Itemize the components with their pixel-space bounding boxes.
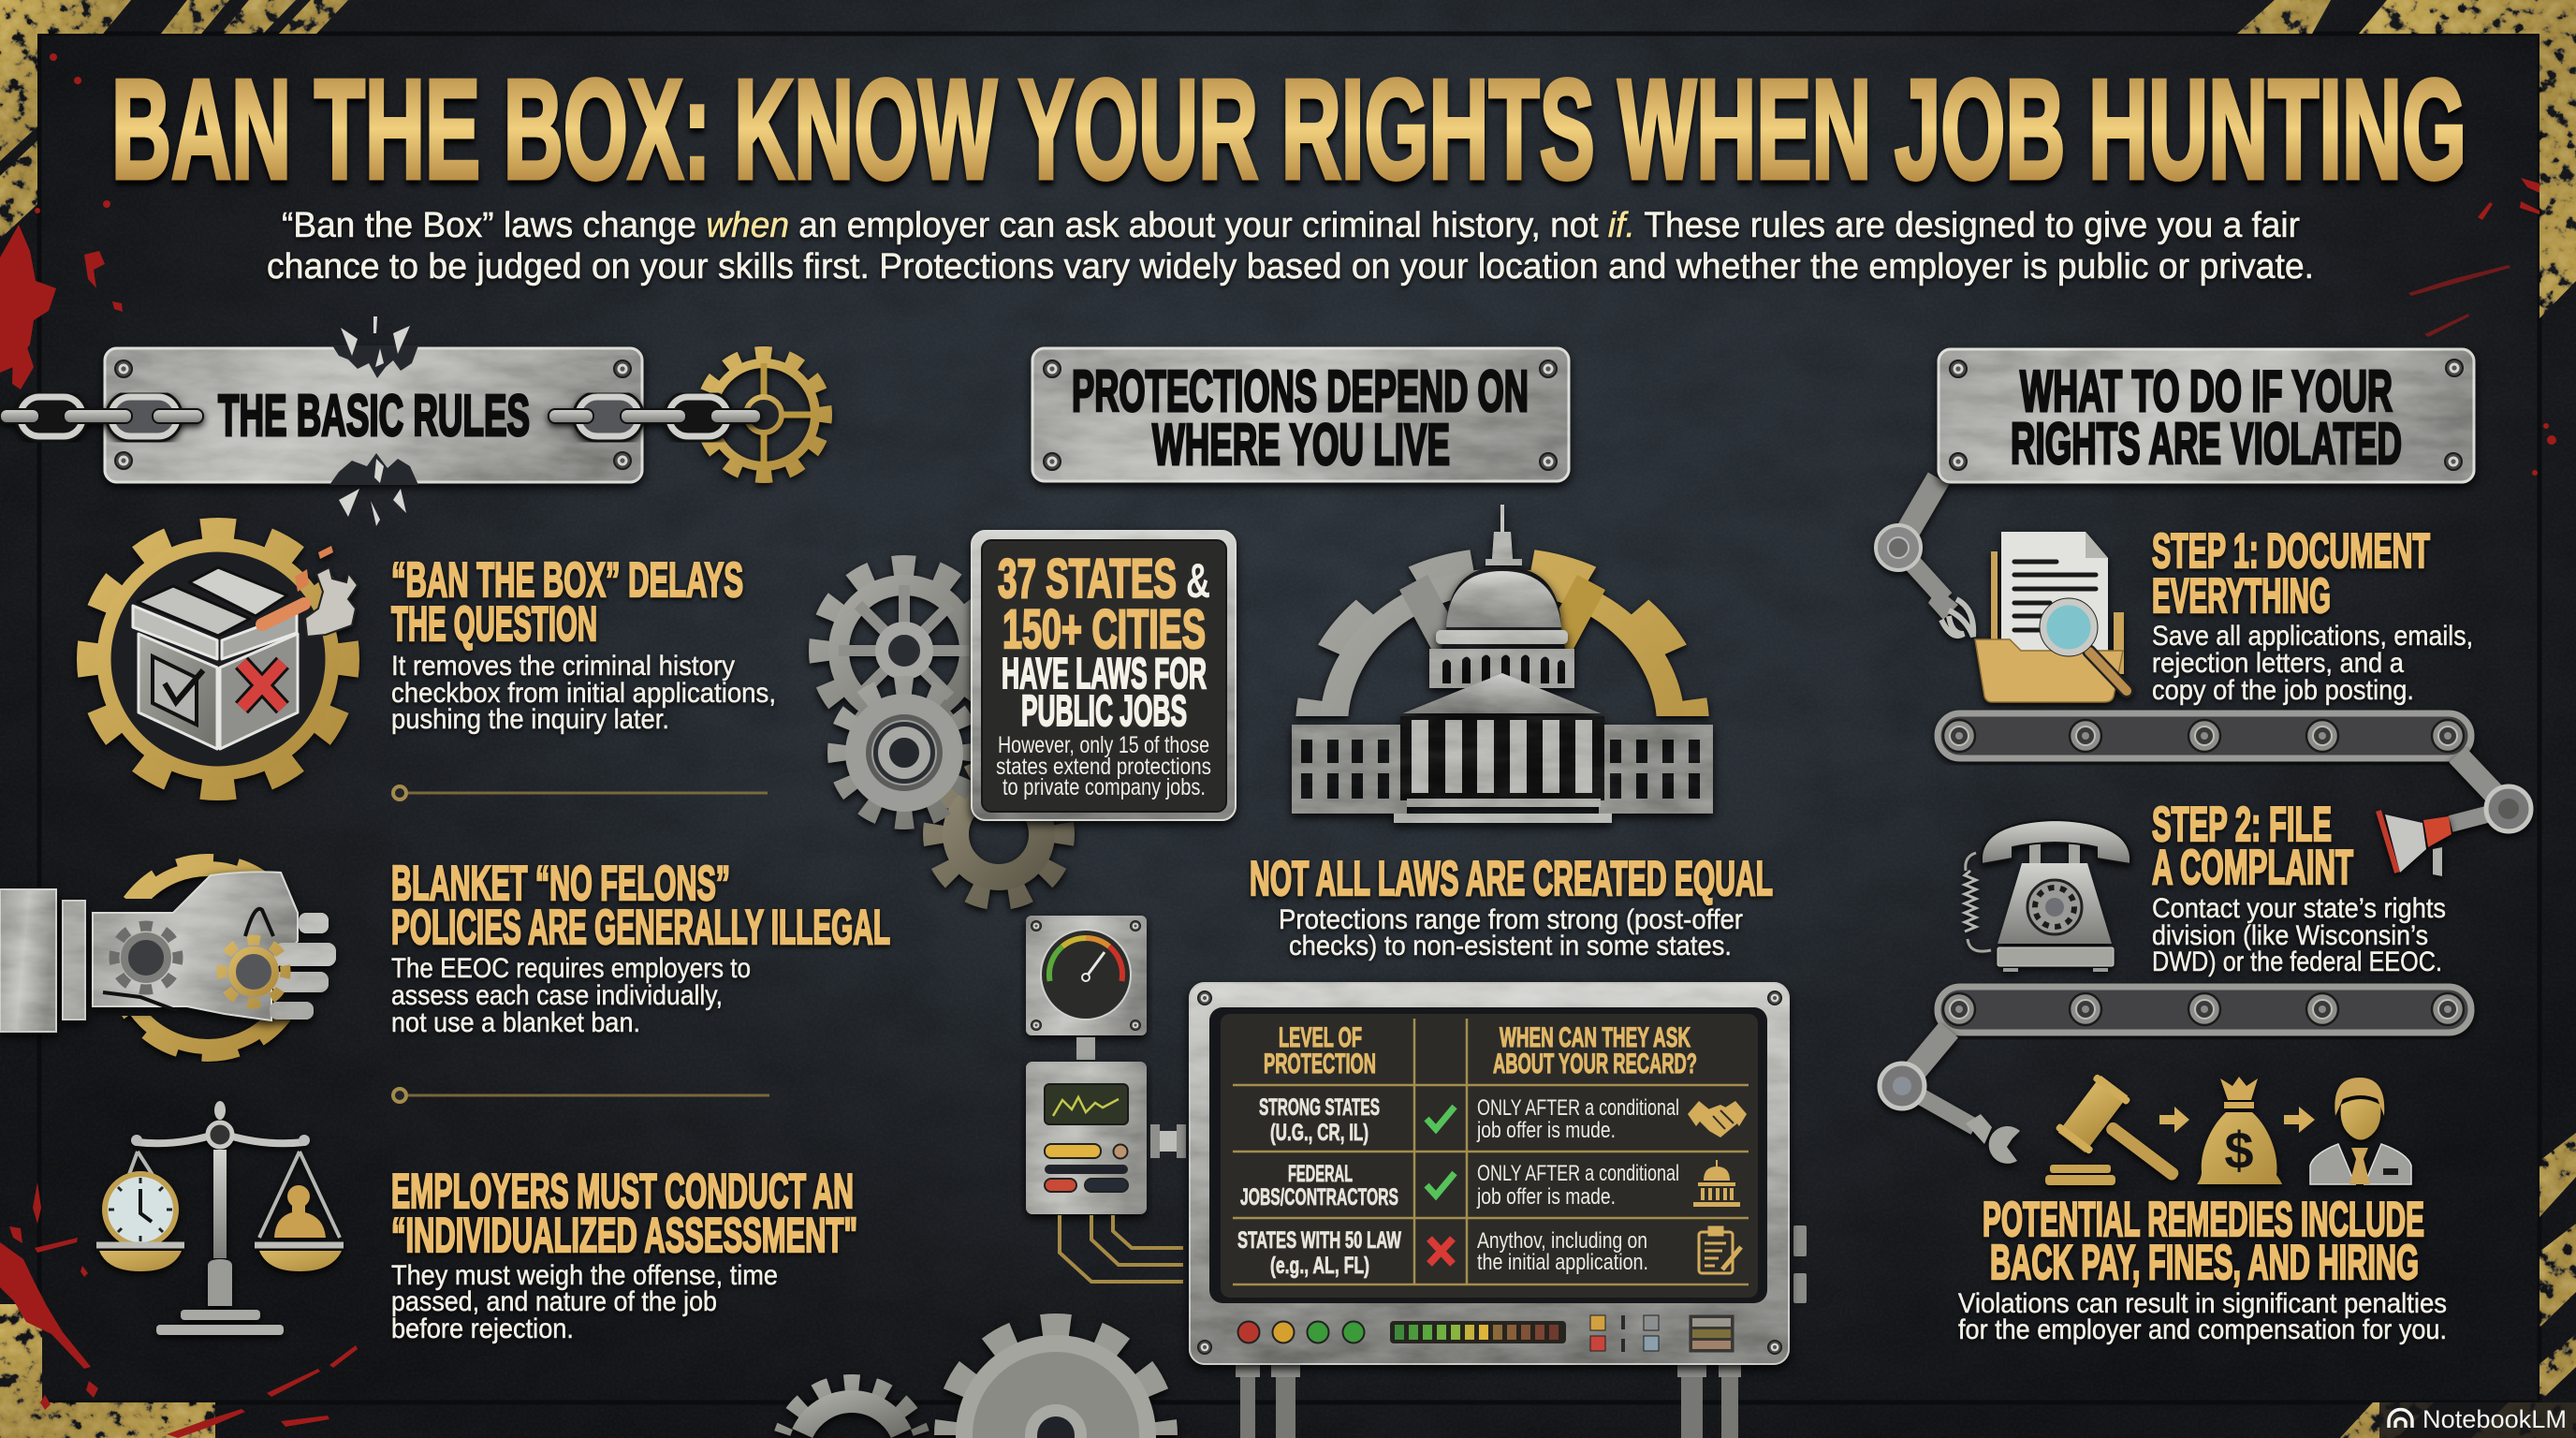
intro text: “Ban the Box” laws change when an employer can ask about your criminal history, not if. These rules are designed to give you a fair xyxy=(282,206,2300,245)
text block: potential remedies: for the employer and compensation for you. xyxy=(1958,1314,2447,1345)
table row: strong states: (U.G., CR, IL) xyxy=(1270,1120,1368,1146)
stat box: states extend protections xyxy=(996,754,1211,780)
heading plate: the basic rules: THE BASIC RULES xyxy=(218,384,530,448)
watermark: NotebookLM: NotebookLM xyxy=(2422,1405,2567,1433)
icon: money bag xyxy=(2197,1077,2282,1184)
table row: strong states xyxy=(1259,1094,1747,1146)
text block: step 2 xyxy=(2152,798,2446,977)
conveyor 2 xyxy=(1938,987,2471,1033)
arm with wrench xyxy=(1880,1030,2020,1164)
stat box: 150+ CITIES xyxy=(1003,599,1206,660)
text block: step 1: rejection letters, and a xyxy=(2152,648,2404,679)
text block: individualized assessment: They must weigh the offense, time xyxy=(391,1260,778,1291)
text block: ban the box delays: checkbox from initial applications, xyxy=(391,678,776,709)
stacked steel gears xyxy=(820,566,1064,900)
text block: not all laws are created equal: checks) to non-esistent in some states. xyxy=(1289,931,1732,961)
icon: capitol with gears xyxy=(1287,505,1718,831)
stat box: & xyxy=(1186,554,1210,609)
bottom gears xyxy=(783,1325,1166,1438)
intro text: chance to be judged on your skills first. Protections vary widely based on your location and whether the employer is public or private. xyxy=(267,247,2314,286)
text block: step 1: EVERYTHING xyxy=(2152,569,2331,624)
stat box: PUBLIC JOBS xyxy=(1021,686,1187,735)
panel: the basic rules xyxy=(0,316,890,1344)
monitor legs xyxy=(1236,1364,1741,1438)
table row: no law: the initial application. xyxy=(1477,1250,1648,1275)
text block: blanket no felons: BLANKET “NO FELONS” xyxy=(391,857,730,911)
watermark: NotebookLM xyxy=(2379,1402,2576,1438)
gear connected to chain xyxy=(702,353,826,477)
panel: protections depend on where you live xyxy=(783,348,1807,1438)
text block: step 2: STEP 2: FILE xyxy=(2152,798,2332,852)
text block: not all laws are created equal: Protections range from strong (post-offer xyxy=(1279,904,1743,935)
text block: step 1: copy of the job posting. xyxy=(2152,675,2414,706)
icon: megaphone xyxy=(2378,811,2452,876)
stat box xyxy=(972,531,1236,820)
stat box: to private company jobs. xyxy=(1003,774,1206,800)
text block: ban the box delays: THE QUESTION xyxy=(391,597,597,652)
text block: potential remedies xyxy=(1958,1193,2447,1345)
control box xyxy=(1026,1062,1186,1214)
table row: strong states: STRONG STATES xyxy=(1259,1094,1380,1121)
text block: step 2: division (like Wisconsin’s xyxy=(2152,920,2428,951)
gauge box xyxy=(1026,916,1147,1035)
table row: federal: FEDERAL xyxy=(1288,1161,1353,1187)
icon: document folder and magnifier xyxy=(1975,532,2127,702)
heading plate: the basic rules xyxy=(105,316,642,526)
text block: step 2: Contact your state’s rights xyxy=(2152,893,2446,924)
text block: ban the box delays: pushing the inquiry later. xyxy=(391,704,669,735)
table header: WHEN CAN THEY ASK xyxy=(1500,1022,1690,1053)
table row: no law: STATES WITH 50 LAW xyxy=(1237,1227,1401,1254)
table row: federal: ONLY AFTER a conditional xyxy=(1477,1161,1679,1186)
text block: individualized assessment: passed, and nature of the job xyxy=(391,1286,717,1317)
text block: ban the box delays xyxy=(391,553,776,735)
table row: no law: Anythov, including on xyxy=(1477,1228,1647,1254)
table header xyxy=(1264,1022,1697,1079)
text block: not all laws are created equal xyxy=(1250,852,1773,961)
monitor table xyxy=(1190,983,1807,1438)
table row: federal: JOBS/CONTRACTORS xyxy=(1240,1184,1398,1211)
icon: gavel xyxy=(2045,1073,2198,1206)
table row: federal xyxy=(1240,1160,1740,1211)
intro text xyxy=(267,206,2314,286)
text block: blanket no felons: assess each case individually, xyxy=(391,980,723,1011)
heading plate: protections xyxy=(1032,348,1569,481)
icon: person in suit xyxy=(2310,1078,2411,1184)
text block: step 1 xyxy=(2152,524,2473,706)
status lights and controls xyxy=(1237,1315,1734,1352)
stat box: 37 STATES xyxy=(998,549,1177,609)
monitor frame xyxy=(1190,983,1789,1364)
text block: individualized assessment: before rejection. xyxy=(391,1313,574,1344)
table header: PROTECTION xyxy=(1264,1049,1376,1079)
heading plate: protections: WHERE YOU LIVE xyxy=(1152,413,1450,477)
text block: individualized assessment xyxy=(391,1165,857,1344)
table row: strong states: job offer is mude. xyxy=(1476,1118,1616,1143)
text block: ban the box delays: “BAN THE BOX” DELAYS xyxy=(391,553,743,608)
text block: blanket no felons xyxy=(391,857,890,1038)
text block: step 1: Save all applications, emails, xyxy=(2152,621,2473,652)
chain left xyxy=(0,397,203,436)
panel: what to do if your rights are violated xyxy=(1876,349,2531,1345)
icon: mechanical fist xyxy=(0,864,336,1051)
arm to megaphone xyxy=(2451,755,2531,831)
conveyor 1 xyxy=(1938,713,2471,758)
stat box: However, only 15 of those xyxy=(998,732,1209,758)
heading plate: what to do xyxy=(1939,349,2474,482)
table row: federal: job offer is made. xyxy=(1476,1184,1616,1210)
text block: potential remedies: Violations can result in significant penalties xyxy=(1958,1288,2447,1319)
text block: not all laws are created equal: NOT ALL LAWS ARE CREATED EQUAL xyxy=(1250,852,1773,906)
icon: money bag: $ xyxy=(2224,1121,2254,1180)
heading plate: protections: PROTECTIONS DEPEND ON xyxy=(1072,360,1529,424)
arm from heading plate xyxy=(1876,478,1973,637)
table row: strong states: ONLY AFTER a conditional xyxy=(1477,1095,1679,1121)
table header: LEVEL OF xyxy=(1279,1022,1362,1053)
chain right xyxy=(549,397,761,436)
table row: no law: (e.g., AL, FL) xyxy=(1270,1253,1369,1279)
table row: no law xyxy=(1237,1227,1741,1279)
icon: scales of justice xyxy=(96,1101,344,1335)
gold wires xyxy=(1060,1215,1183,1282)
icon: telephone xyxy=(1965,820,2130,972)
stat box: HAVE LAWS FOR xyxy=(1002,649,1207,697)
text block: blanket no felons: not use a blanket ban. xyxy=(391,1007,640,1038)
text block: blanket no felons: The EEOC requires employers to xyxy=(391,953,751,984)
arrow xyxy=(2159,1107,2189,1133)
arrow xyxy=(2284,1107,2315,1133)
text block: individualized assessment: “INDIVIDUALIZED ASSESSMENT" xyxy=(391,1209,857,1263)
text block: individualized assessment: EMPLOYERS MUST CONDUCT AN xyxy=(391,1165,854,1219)
text block: blanket no felons: POLICIES ARE GENERALLY ILLEGAL xyxy=(391,901,890,955)
text block: ban the box delays: It removes the criminal history xyxy=(391,651,735,682)
text block: step 2: A COMPLAINT xyxy=(2152,841,2353,895)
icon: gear with box xyxy=(88,529,358,789)
text block: step 2: DWD) or the federal EEOC. xyxy=(2152,946,2442,977)
table header: ABOUT YOUR RECARD? xyxy=(1493,1049,1697,1079)
